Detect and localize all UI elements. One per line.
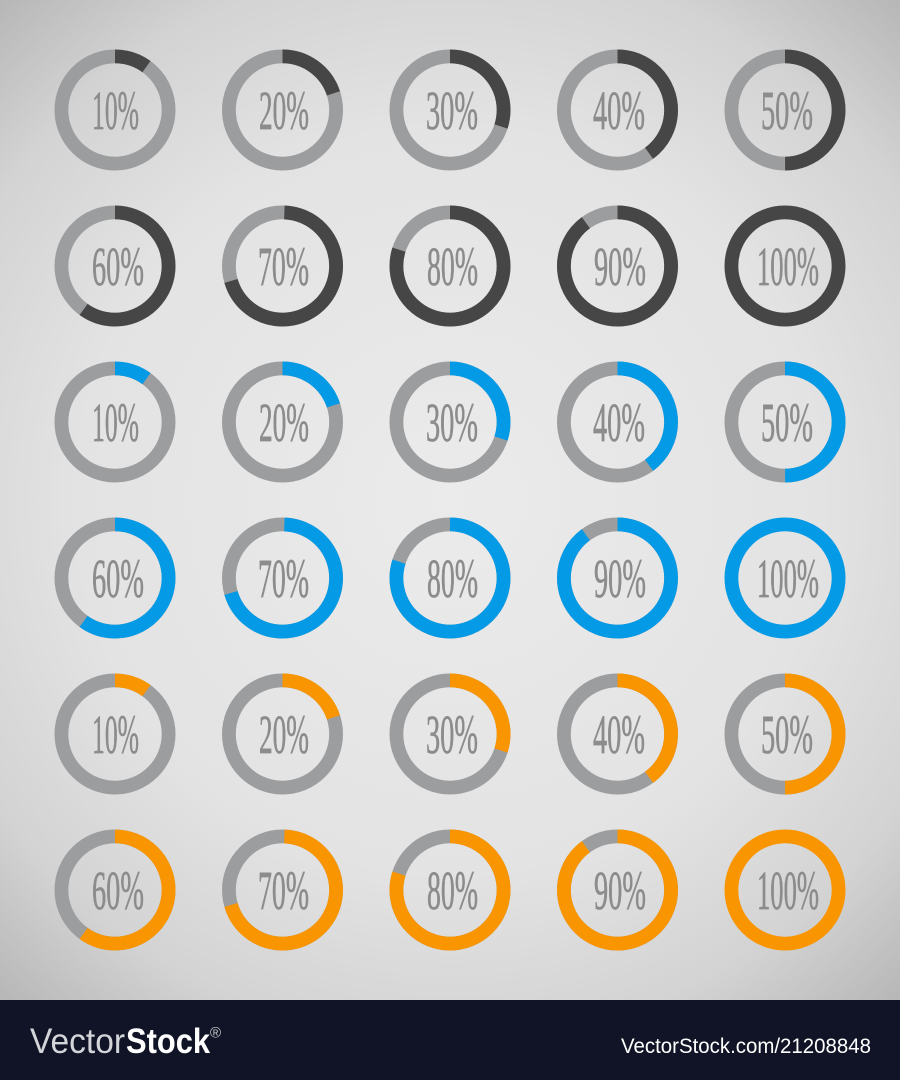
ring: dark 70%: 70%	[258, 236, 309, 297]
ring: dark 90%: 90%	[594, 236, 646, 297]
ring: blue 20%	[229, 368, 336, 476]
ring: dark 90%	[564, 212, 671, 320]
group: dark rings	[61, 56, 839, 321]
footer logo	[30, 1022, 210, 1061]
ring: dark 80%: 80%	[427, 236, 478, 297]
ring: dark 100%: 100%	[757, 236, 819, 297]
ring: orange 70%	[227, 835, 338, 945]
ring: blue 60%	[61, 524, 169, 632]
footer image id: VectorStock.com/21208848	[621, 1035, 871, 1058]
ring: orange 30%: 30%	[426, 704, 478, 765]
ring: dark 10%: 10%	[92, 80, 139, 141]
ring: orange 50%	[731, 680, 839, 788]
ring: dark 30%	[396, 56, 504, 164]
ring: dark 100%	[731, 212, 839, 320]
ring: blue 30%	[396, 368, 504, 476]
ring: dark 40%	[564, 56, 671, 164]
ring: orange 60%: 60%	[92, 860, 144, 921]
ring: orange 20%	[229, 680, 336, 788]
ring: orange 20%: 20%	[259, 704, 309, 765]
ring: blue 20%: 20%	[259, 392, 309, 453]
footer bar	[0, 1000, 900, 1080]
ring: orange 80%	[396, 836, 504, 944]
ring: orange 60%	[61, 836, 169, 944]
ring: blue 40%	[564, 368, 671, 476]
ring: dark 60%: 60%	[92, 236, 144, 297]
footer registered mark: ®	[210, 1024, 221, 1042]
ring: blue 90%	[564, 524, 671, 632]
ring: orange 80%: 80%	[427, 860, 478, 921]
ring: dark 20%: 20%	[259, 80, 309, 141]
footer logo: Stock	[126, 1022, 210, 1061]
ring: blue 60%: 60%	[92, 548, 144, 609]
ring: blue 100%	[731, 524, 839, 632]
ring: dark 20%	[229, 56, 336, 164]
group: blue rings	[61, 368, 839, 633]
ring: orange 10%: 10%	[92, 704, 139, 765]
ring: blue 90%: 90%	[594, 548, 646, 609]
ring: dark 50%: 50%	[761, 80, 813, 141]
ring: blue 80%	[396, 524, 504, 632]
footer logo: Vector	[30, 1022, 125, 1061]
ring: orange 100%	[731, 836, 839, 944]
ring: dark 40%: 40%	[593, 80, 645, 141]
ring: dark 80%	[396, 212, 504, 320]
ring: blue 70%	[227, 523, 338, 633]
ring: orange 90%	[564, 836, 671, 944]
ring: dark 50%	[731, 56, 839, 164]
ring: orange 10%	[61, 680, 169, 788]
ring: blue 10%: 10%	[92, 392, 139, 453]
ring: blue 100%: 100%	[757, 548, 819, 609]
ring: dark 30%: 30%	[426, 80, 478, 141]
ring: blue 70%: 70%	[258, 548, 309, 609]
ring: orange 100%: 100%	[757, 860, 819, 921]
group: orange rings	[61, 680, 839, 945]
ring: dark 60%	[61, 212, 169, 320]
ring: orange 30%	[396, 680, 504, 788]
ring: orange 40%	[564, 680, 671, 788]
ring: orange 90%: 90%	[594, 860, 646, 921]
ring: blue 50%: 50%	[761, 392, 813, 453]
ring: orange 70%: 70%	[258, 860, 309, 921]
ring: dark 10%	[61, 56, 169, 164]
ring: blue 50%	[731, 368, 839, 476]
ring: blue 40%: 40%	[593, 392, 645, 453]
ring: dark 70%	[227, 211, 338, 321]
ring: blue 30%: 30%	[426, 392, 478, 453]
ring: blue 10%	[61, 368, 169, 476]
ring: blue 80%: 80%	[427, 548, 478, 609]
ring: orange 40%: 40%	[593, 704, 645, 765]
ring: orange 50%: 50%	[761, 704, 813, 765]
